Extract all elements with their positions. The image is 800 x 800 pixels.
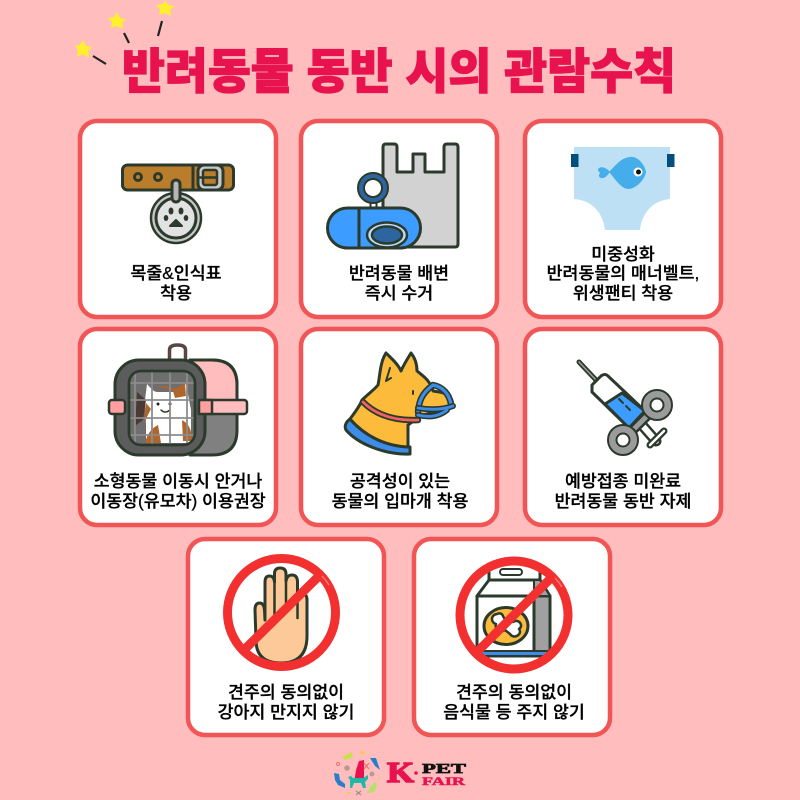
label: 반려동물의 매너벨트, [547, 263, 699, 283]
label: 동물의 입마개 착용 [332, 491, 468, 511]
icon: prohibited hand [228, 558, 336, 666]
label: 즉시 수거 [365, 283, 433, 303]
label: 위생팬티 착용 [573, 283, 673, 303]
label: 목줄&인식표 [130, 263, 222, 283]
panel: carrier [80, 329, 276, 525]
panel: no feeding [414, 539, 610, 735]
panel: no touching [188, 539, 384, 735]
label: 공격성이 있는 [350, 471, 450, 491]
label: 견주의 동의없이 [456, 682, 572, 702]
label: 반려동물 동반 자제 [555, 491, 691, 511]
logo: K-PET FAIR [334, 751, 467, 795]
label: 소형동물 이동시 안거나 [94, 471, 262, 491]
label: 견주의 동의없이 [228, 682, 344, 702]
label: 이동장(유모차) 이용권장 [90, 491, 266, 511]
panel: diaper [525, 121, 721, 317]
title: 반려동물 동반 시의 관람수칙 [122, 46, 676, 99]
decorative stars [75, 0, 175, 64]
label: 반려동물 배변 [349, 263, 449, 283]
icon: dog with muzzle [345, 353, 453, 454]
logo: K-PET FAIR: PET [422, 762, 467, 777]
icon: manner belt [571, 147, 674, 230]
logo: K-PET FAIR: FAIR [422, 774, 465, 788]
icon: pet carrier [109, 345, 247, 455]
icon: waste bag dispenser [328, 144, 458, 248]
icon: prohibited food bag [460, 561, 568, 669]
label: 강아지 만지지 않기 [218, 702, 354, 722]
icon: collar and tag [122, 165, 234, 243]
panel: syringe [525, 329, 721, 525]
panel: bag [301, 121, 497, 317]
label: 음식물 등 주지 않기 [443, 702, 585, 722]
label: 예방접종 미완료 [565, 471, 681, 491]
icon: syringe [579, 362, 672, 455]
panel: collar [80, 121, 276, 317]
icon: animal wreath [334, 751, 380, 795]
wordmark: K [387, 757, 415, 789]
label: 미중성화 [591, 244, 655, 264]
panel: muzzle [301, 329, 497, 525]
label: 착용 [160, 283, 192, 303]
